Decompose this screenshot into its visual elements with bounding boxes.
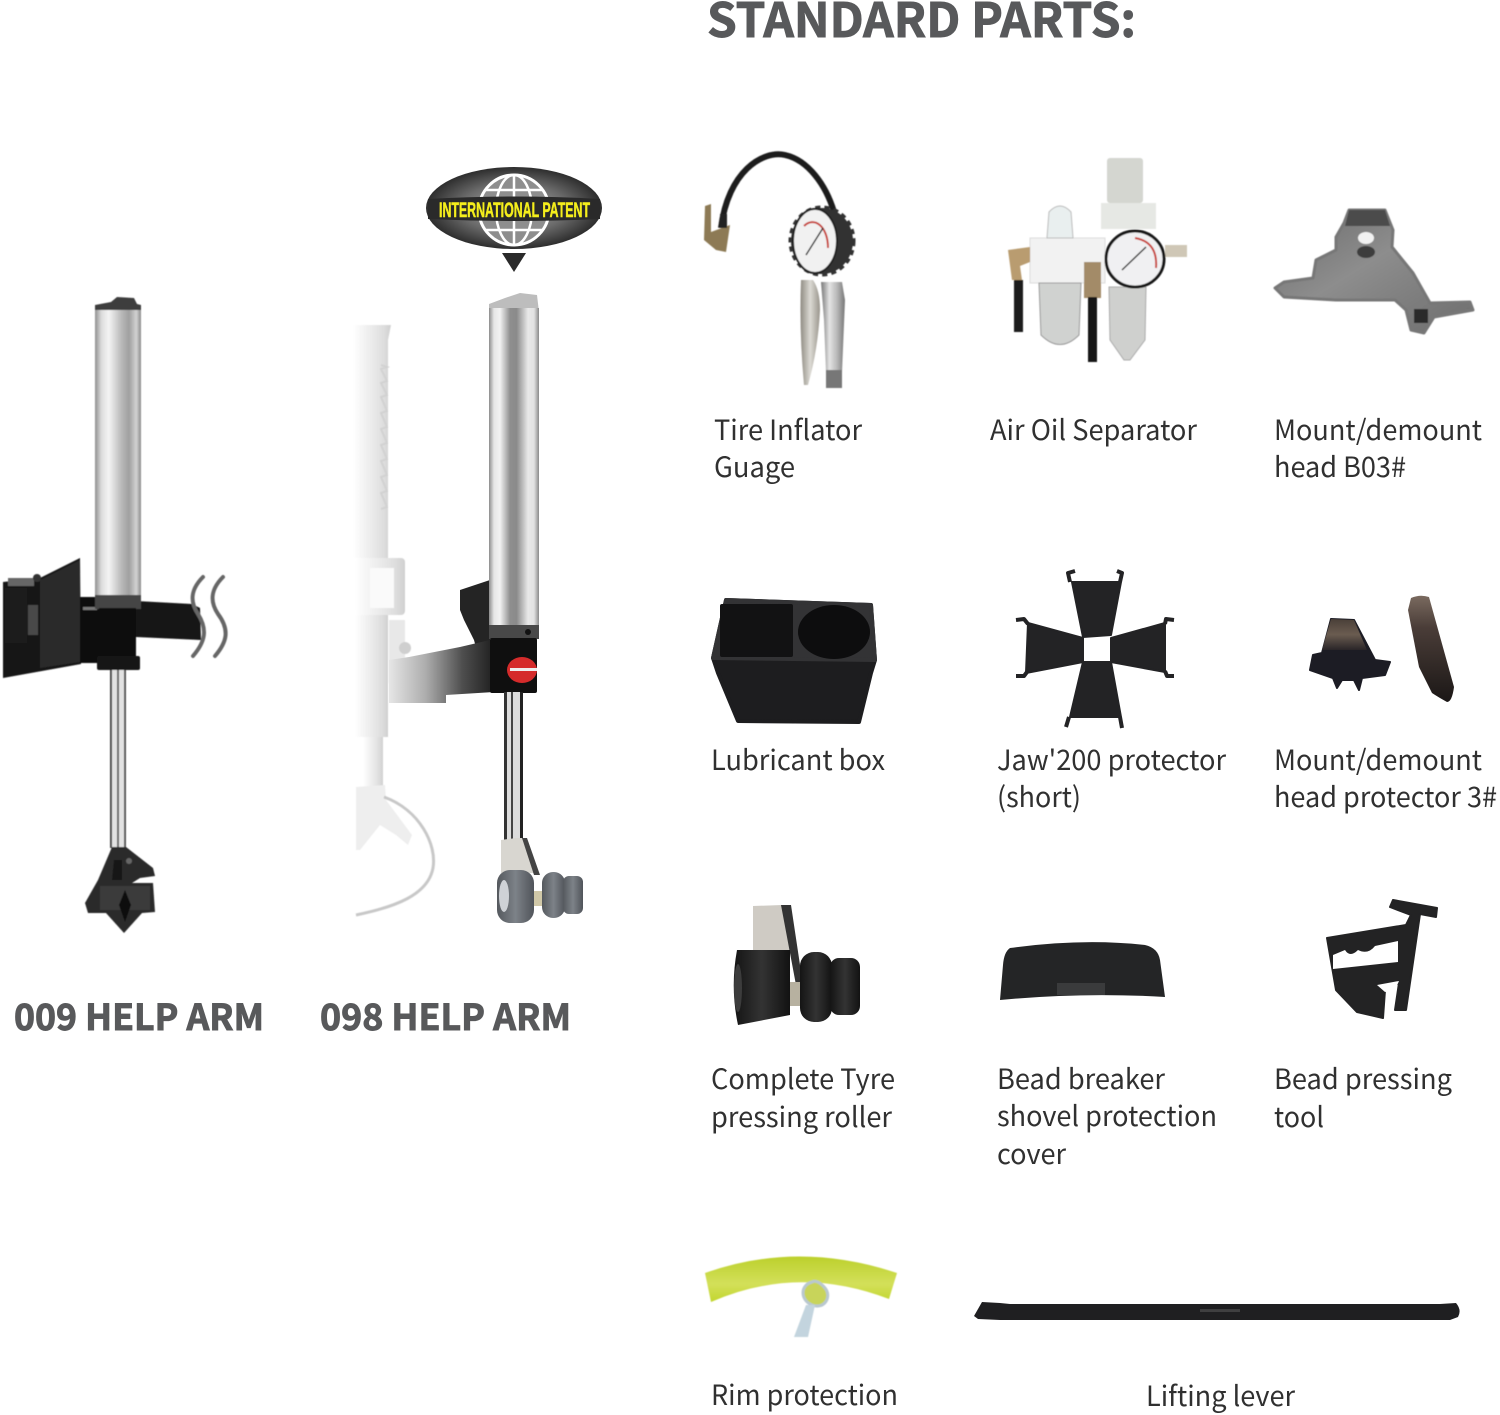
collar [95, 595, 141, 609]
part: lubricant box [713, 600, 875, 722]
roller head [497, 838, 583, 923]
collar [489, 625, 539, 639]
bracket plate [460, 580, 490, 655]
silver cylinder [489, 308, 539, 626]
column with badge [490, 638, 537, 693]
label: tyre pressing roller: Complete Tyre [711, 1058, 895, 1098]
fading arm [389, 640, 494, 703]
panel: 009 help arm [3, 297, 226, 933]
label: bead pressing tool: tool [1274, 1096, 1324, 1136]
label: tire inflator gauge: Guage [714, 446, 795, 486]
label: lubricant box: Lubricant box [711, 739, 885, 779]
help arm head [85, 847, 155, 933]
part: rim protection [705, 1256, 897, 1337]
cap [95, 297, 141, 313]
label: tire inflator gauge [714, 409, 862, 486]
part: mount/demount head protector [1310, 596, 1454, 702]
label: mount/demount head B03# [1274, 409, 1482, 486]
label: bead breaker shovel cover: Bead breaker [997, 1058, 1165, 1098]
break marks [193, 577, 226, 656]
part: air oil separator [1008, 158, 1187, 362]
cap [489, 293, 539, 312]
label: jaw protector [997, 739, 1226, 816]
part: lifting lever [974, 1302, 1460, 1320]
part: bead pressing tool [1327, 900, 1437, 1018]
panel: 098 help arm [353, 293, 583, 923]
label: jaw protector: Jaw'200 protector [997, 739, 1226, 779]
icon: international patent badge: INTERNATIONAL PATENT [439, 199, 590, 222]
part: bead breaker shovel cover [1000, 942, 1165, 1000]
label: jaw protector: (short) [997, 776, 1081, 816]
label: air oil separator: Air Oil Separator [990, 409, 1197, 449]
part: tire inflator gauge [704, 154, 853, 388]
label: bead pressing tool [1274, 1058, 1452, 1136]
label: bead breaker shovel cover [997, 1058, 1217, 1173]
rods [504, 692, 523, 842]
label: mount/demount head protector [1274, 739, 1497, 816]
label: mount/demount head protector: head protector 3# [1274, 776, 1497, 816]
part: mount/demount head B03# [1275, 210, 1473, 333]
label: 009 help arm: 009 HELP ARM [14, 989, 264, 1041]
label: mount/demount head protector: Mount/demount [1274, 739, 1482, 779]
rods [110, 670, 126, 848]
label: lifting lever: Lifting lever [1146, 1375, 1295, 1415]
label: 098 help arm: 098 HELP ARM [320, 989, 571, 1041]
label: tyre pressing roller [711, 1058, 895, 1136]
part: jaw protector [1016, 571, 1174, 728]
column [99, 608, 136, 657]
label: tyre pressing roller: pressing roller [711, 1096, 892, 1136]
horizontal beam [136, 601, 201, 640]
flange [97, 656, 140, 670]
label: tire inflator gauge: Tire Inflator [714, 409, 862, 449]
silver cylinder [95, 310, 141, 596]
label: bead breaker shovel cover: shovel protection [997, 1095, 1217, 1135]
label: bead pressing tool: Bead pressing [1274, 1058, 1452, 1098]
label: rim protection: Rim protection [711, 1374, 898, 1414]
ghost arm [353, 325, 434, 915]
label: mount/demount head B03#: head B03# [1274, 446, 1406, 486]
part: tyre pressing roller [734, 905, 860, 1025]
label: bead breaker shovel cover: cover [997, 1133, 1066, 1173]
icon: international patent badge [426, 167, 602, 272]
wall plate [3, 558, 100, 678]
label: mount/demount head B03#: Mount/demount [1274, 409, 1482, 449]
